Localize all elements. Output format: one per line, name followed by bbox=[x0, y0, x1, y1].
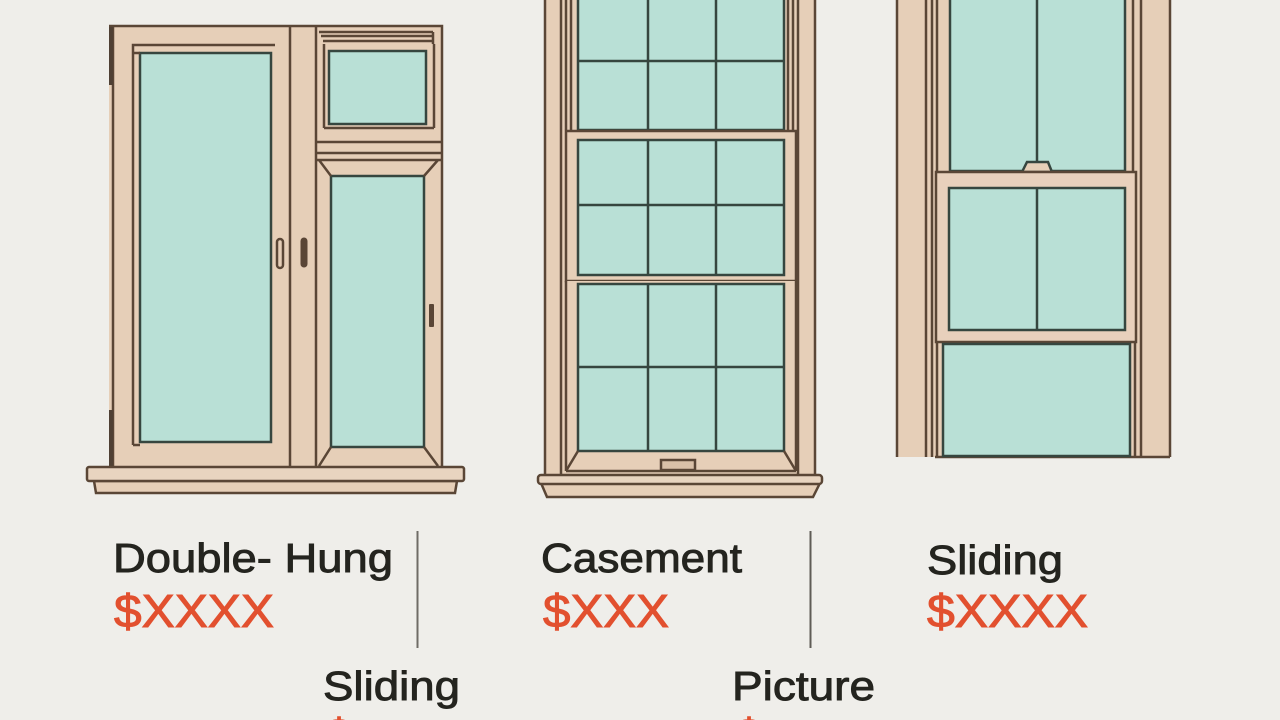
window sill bbox=[87, 467, 464, 493]
sash lift bbox=[661, 460, 695, 470]
label: Double-Hung: Double- Hung bbox=[113, 535, 393, 581]
label: Sliding: Sliding bbox=[927, 537, 1063, 583]
lower sash bbox=[936, 172, 1136, 342]
latch bbox=[429, 304, 434, 327]
sash catch bbox=[1022, 162, 1052, 172]
window illustration: sliding style unit bbox=[897, 0, 1170, 457]
window illustration: casement style unit bbox=[538, 0, 822, 497]
price: Casement: $XXX bbox=[543, 585, 669, 637]
window illustration: double-hung style unit bbox=[87, 26, 464, 493]
price: Sliding: $XXXX bbox=[927, 585, 1088, 637]
label: Casement: Casement bbox=[541, 535, 743, 581]
upper glass bbox=[950, 0, 1125, 171]
label: Sliding (second row): Sliding bbox=[323, 663, 460, 709]
window sill bbox=[538, 475, 822, 497]
lower right glass pane bbox=[331, 176, 424, 447]
meeting rail and middle sash bbox=[566, 131, 796, 281]
upper right glass pane bbox=[329, 51, 426, 124]
price: Double-Hung: $XXXX bbox=[114, 585, 274, 637]
upper grid glass bbox=[578, 0, 784, 130]
left glass pane bbox=[140, 53, 271, 442]
lower grid glass bbox=[566, 281, 796, 471]
bottom glass bbox=[943, 344, 1130, 456]
door handles bbox=[277, 238, 307, 268]
label: Picture: Picture bbox=[732, 663, 875, 709]
